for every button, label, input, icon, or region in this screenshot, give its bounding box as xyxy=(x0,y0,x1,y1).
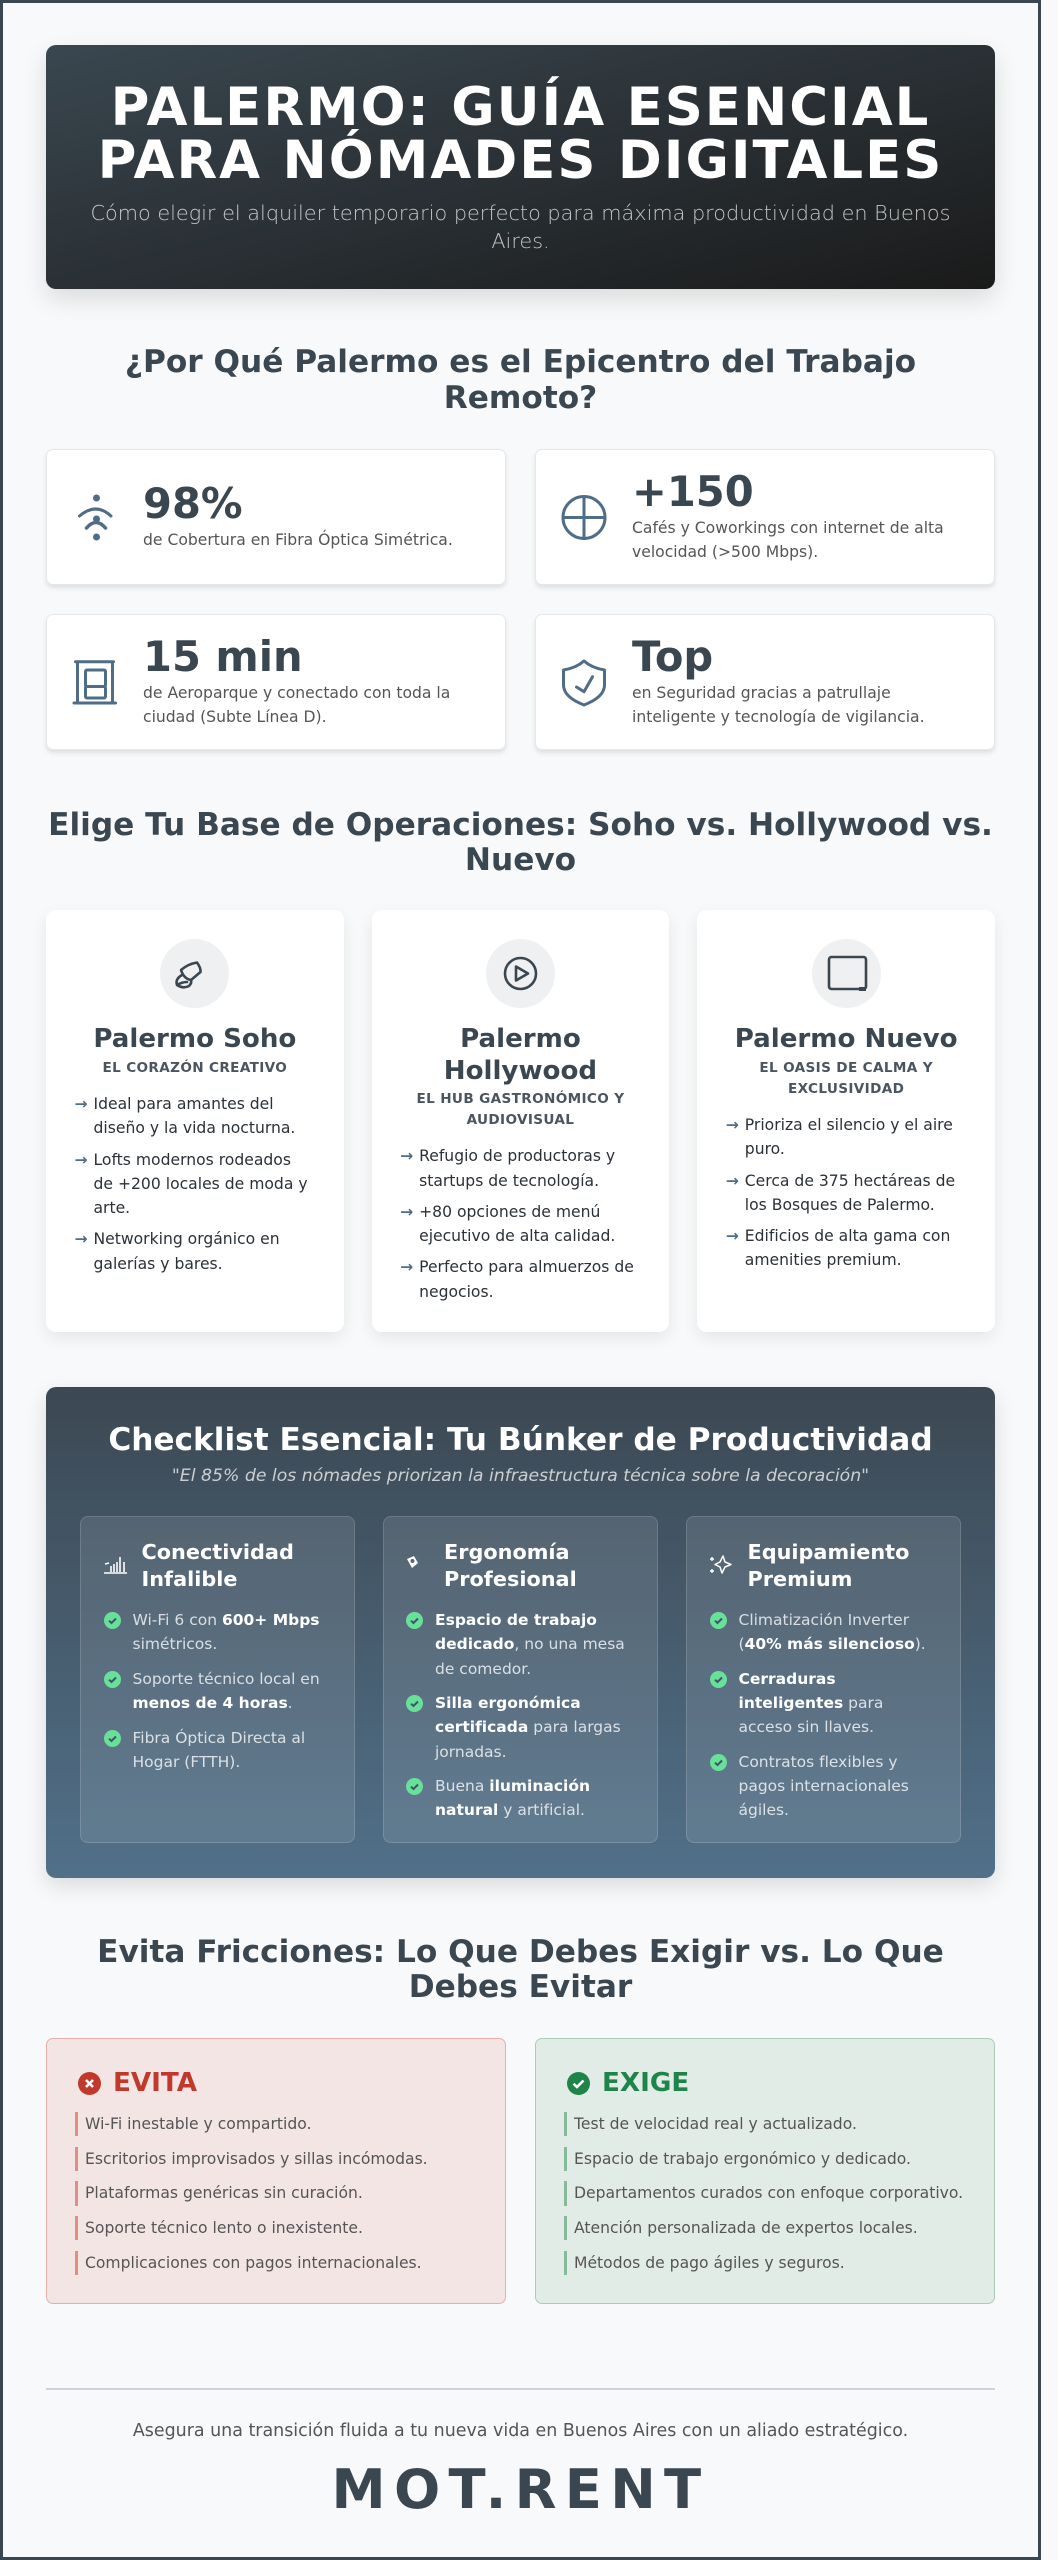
heading: choose base: Elige Tu Base de Operaciones: Soho vs. Hollywood vs. xyxy=(48,807,993,843)
demand list: Departamentos curados con enfoque corporativo. xyxy=(574,2184,963,2202)
bullet list: Lofts modernos rodeados de +200 locales de moda y arte. xyxy=(94,1151,308,1217)
icon: building xyxy=(72,660,117,704)
district tagline: EL CORAZÓN CREATIVO xyxy=(102,1060,287,1076)
stat text: de Aeroparque y conectado con toda la ciudad (Subte Línea D). xyxy=(143,684,450,726)
avoid list: Wi-Fi inestable y compartido. xyxy=(85,2115,311,2133)
stat text: de Cobertura en Fibra Óptica Simétrica. xyxy=(143,531,453,549)
demand list: Atención personalizada de expertos locales. xyxy=(574,2219,918,2237)
avoid list: Plataformas genéricas sin curación. xyxy=(85,2184,363,2202)
heading: why Palermo: Remoto? xyxy=(444,380,597,416)
district tagline: EL HUB GASTRONÓMICO Y AUDIOVISUAL xyxy=(416,1091,624,1128)
icon: play xyxy=(486,939,555,1008)
avoid list: Escritorios improvisados y sillas incómodas. xyxy=(85,2150,428,2168)
district name: Palermo Nuevo xyxy=(735,1024,958,1054)
heading: why Palermo xyxy=(125,344,916,416)
bullet list: → xyxy=(400,1258,413,1276)
bullet list: Prioriza el silencio y el aire puro. xyxy=(745,1116,953,1158)
checks: Silla ergonómica certificada para largas jornadas. xyxy=(435,1694,621,1761)
card heading xyxy=(748,1540,909,1591)
avoid list: Soporte técnico lento o inexistente. xyxy=(85,2219,363,2237)
stat text xyxy=(632,467,944,561)
icon: globe xyxy=(562,495,606,540)
demand list: Test de velocidad real y actualizado. xyxy=(574,2115,857,2133)
bullet list: → xyxy=(74,1151,88,1169)
panel: checklist xyxy=(46,1387,995,1878)
icon: tablet xyxy=(812,939,881,1008)
card heading xyxy=(444,1540,577,1591)
icon: chair xyxy=(407,1556,418,1568)
title xyxy=(98,76,943,190)
card heading: Equipamiento xyxy=(748,1540,909,1564)
heading: choose base: Nuevo xyxy=(465,842,576,878)
bullet list: Edificios de alta gama con amenities premium. xyxy=(745,1227,950,1269)
panel: Palermo Hollywood xyxy=(372,910,669,1332)
bullet list: → xyxy=(726,1227,739,1245)
subtitle: Cómo elegir el alquiler temporario perfecto para máxima productividad en Buenos Aires. xyxy=(90,201,950,253)
card heading: Conectividad xyxy=(142,1540,294,1564)
checks: Fibra Óptica Directa al Hogar (FTTH). xyxy=(132,1729,305,1771)
bullet list: → xyxy=(726,1172,739,1190)
bullet list: Perfecto para almuerzos de negocios. xyxy=(419,1258,634,1301)
stat text xyxy=(632,632,925,726)
card heading: Profesional xyxy=(444,1567,577,1591)
bullet list: Refugio de productoras y startups de tecnología. xyxy=(419,1147,615,1190)
panel: Palermo Soho xyxy=(46,910,344,1332)
demand heading: EXIGE xyxy=(602,2068,689,2098)
checks xyxy=(710,1611,926,1819)
heading: avoid friction: Evita Fricciones: Lo Que Debes Exigir vs. Lo Que xyxy=(97,1934,944,1970)
heading: avoid friction xyxy=(97,1934,944,2005)
bullet list: +80 opciones de menú ejecutivo de alta calidad. xyxy=(419,1203,615,1245)
stat card: security xyxy=(535,614,995,750)
icon: sparkles xyxy=(710,1555,732,1574)
card: ergonomics xyxy=(382,1516,658,1843)
checks: Soporte técnico local en menos de 4 horas. xyxy=(132,1670,320,1712)
stat text: 98% xyxy=(143,479,243,528)
avoid heading: EVITA xyxy=(113,2068,197,2098)
card heading: Infalible xyxy=(142,1567,238,1591)
card: equipment xyxy=(686,1516,961,1843)
icon: brush xyxy=(160,939,229,1008)
demand list xyxy=(564,2112,963,2275)
icon: cross xyxy=(78,2072,101,2095)
bullet list: Networking orgánico en galerías y bares. xyxy=(94,1230,280,1273)
district name: Palermo Hollywood xyxy=(444,1024,597,1086)
bullet list: → xyxy=(74,1230,88,1248)
icon: check xyxy=(567,2072,590,2095)
heading: choose base xyxy=(48,807,993,878)
checks: Espacio de trabajo dedicado, no una mesa de comedor. xyxy=(435,1611,625,1678)
bullet list: → xyxy=(726,1116,739,1134)
stat card: fibre coverage xyxy=(46,449,506,585)
bullet list xyxy=(400,1147,634,1301)
stat text: Cafés y Coworkings con internet de alta velocidad (>500 Mbps). xyxy=(632,519,944,561)
stat text: +150 xyxy=(632,467,754,516)
card heading: Premium xyxy=(748,1567,852,1591)
card heading: Ergonomía xyxy=(444,1540,570,1564)
stat card: airport xyxy=(46,614,506,750)
checks: Cerraduras inteligentes para acceso sin llaves. xyxy=(738,1670,883,1736)
footer text: Asegura una transición fluida a tu nueva vida en Buenos Aires con un aliado estratégico. xyxy=(133,2421,908,2441)
bullet list: → xyxy=(400,1147,413,1165)
panel: demand xyxy=(535,2038,995,2304)
logo: MOT.RENT xyxy=(332,2458,709,2521)
demand list: Métodos de pago ágiles y seguros. xyxy=(574,2254,845,2272)
card: connectivity xyxy=(80,1516,355,1843)
quote: "El 85% de los nómades priorizan la infraestructura técnica sobre la decoración" xyxy=(172,1466,869,1486)
icon: shield xyxy=(562,660,606,706)
bullet list: Ideal para amantes del diseño y la vida nocturna. xyxy=(94,1095,295,1137)
bullet list: Cerca de 375 hectáreas de los Bosques de Palermo. xyxy=(745,1172,955,1214)
checklist heading: Checklist Esencial: Tu Búnker de Productividad xyxy=(108,1422,933,1458)
panel: avoid xyxy=(46,2038,506,2304)
checks: Contratos flexibles y pagos internacionales ágiles. xyxy=(738,1753,909,1819)
checks xyxy=(104,1611,320,1771)
title: PALERMO: GUÍA ESENCIAL xyxy=(111,77,930,138)
checks: Buena iluminación natural y artificial. xyxy=(435,1777,590,1819)
demand list: Espacio de trabajo ergonómico y dedicado. xyxy=(574,2150,911,2168)
stat text xyxy=(143,479,453,549)
icon: signal chart xyxy=(104,1557,127,1574)
icon: wifi xyxy=(78,494,113,540)
avoid list: Complicaciones con pagos internacionales. xyxy=(85,2254,422,2272)
card heading xyxy=(142,1540,294,1591)
stat text: Top xyxy=(632,632,713,681)
district tagline: EL OASIS DE CALMA Y EXCLUSIVIDAD xyxy=(759,1060,933,1096)
stat text: en Seguridad gracias a patrullaje inteligente y tecnología de vigilancia. xyxy=(632,684,925,726)
stat text: 15 min xyxy=(143,632,303,681)
avoid list xyxy=(75,2112,428,2275)
checks: Wi-Fi 6 con 600+ Mbps simétricos. xyxy=(132,1611,320,1653)
bullet list: → xyxy=(400,1203,413,1221)
bullet list xyxy=(726,1116,955,1269)
footer rule xyxy=(46,2388,995,2390)
stat card: cafes xyxy=(535,449,995,585)
panel: Palermo Nuevo xyxy=(697,910,995,1332)
checks: Climatización Inverter (40% más silencioso). xyxy=(738,1611,926,1653)
checks xyxy=(406,1611,625,1819)
bullet list xyxy=(74,1095,308,1273)
district name: Palermo Soho xyxy=(93,1024,296,1054)
stat text xyxy=(143,632,450,726)
heading: why Palermo: ¿Por Qué Palermo es el Epicentro del Trabajo xyxy=(125,344,916,380)
bullet list: → xyxy=(74,1095,88,1113)
title: PARA NÓMADES DIGITALES xyxy=(98,130,943,190)
heading: avoid friction: Debes Evitar xyxy=(409,1969,632,2005)
header panel xyxy=(46,45,995,289)
